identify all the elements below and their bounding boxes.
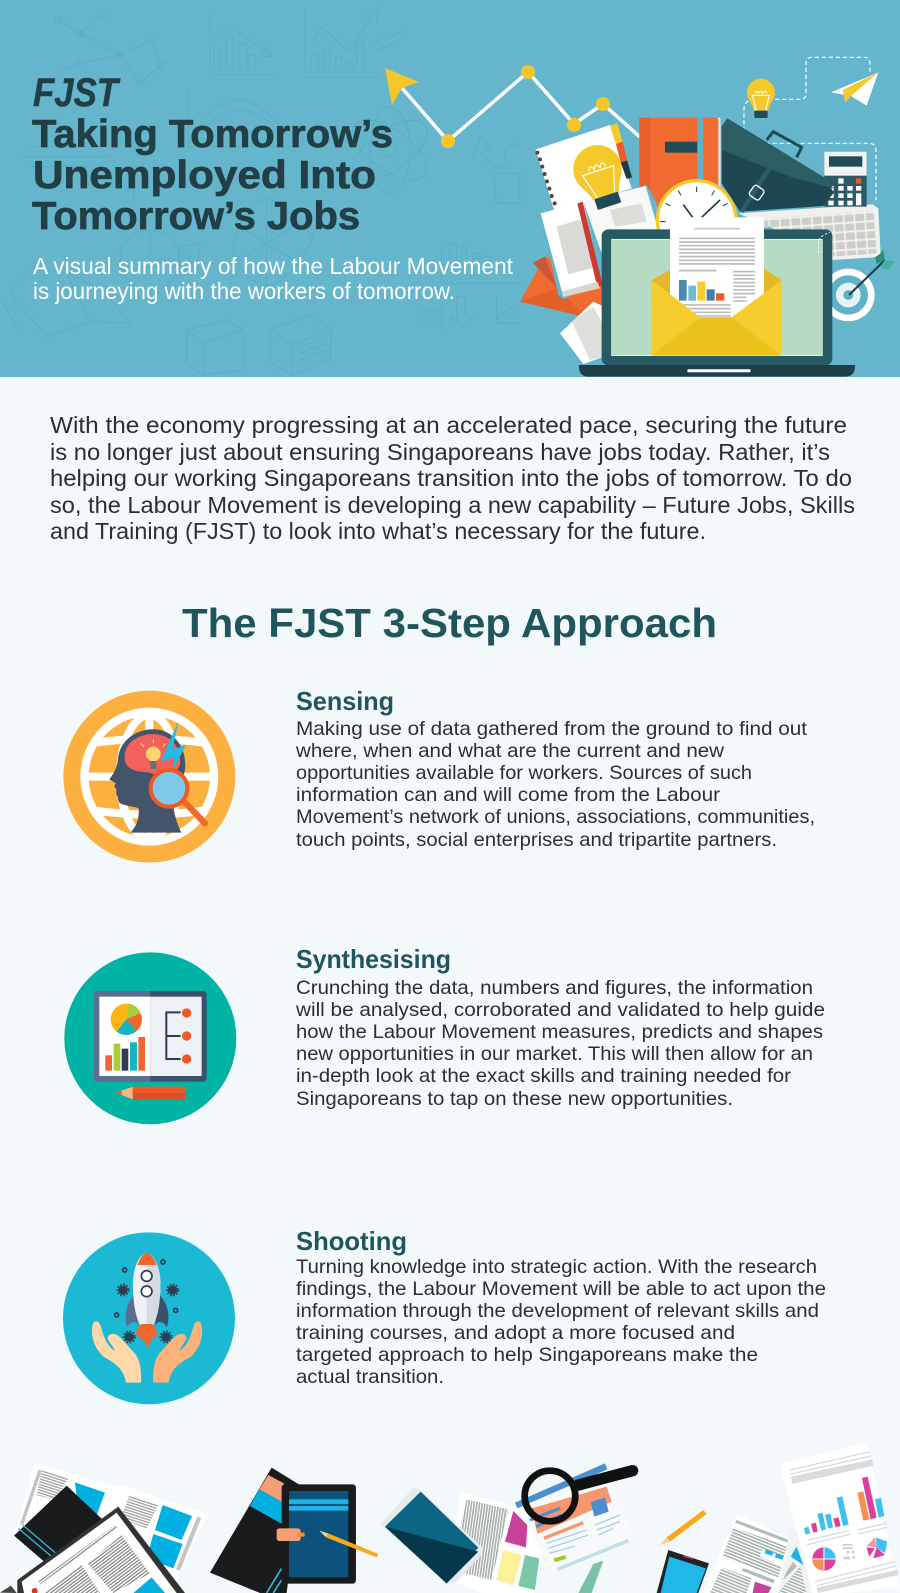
document bar chart (679, 280, 724, 301)
heading: synthesising: Synthesising (296, 944, 451, 974)
subtitle: A visual summary of how the Labour Movement (33, 253, 514, 279)
icon: small light bulb (747, 79, 775, 118)
dashed path (744, 57, 876, 200)
text: shooting description: targeted approach to help Singaporeans make the (296, 1344, 758, 1366)
subtitle: is journeying with the workers of tomorrow. (33, 278, 455, 304)
text: synthesising description: will be analysed, corroborated and validated to help guide (295, 999, 825, 1021)
web page sheet (515, 1463, 635, 1573)
title: main headline: Tomorrow’s Jobs (32, 195, 360, 238)
document text lines (679, 229, 755, 316)
intro paragraph: is no longer just about ensuring Singaporeans have jobs today. Rather, it’s (50, 439, 830, 465)
panel: header (0, 0, 900, 377)
icon: target and arrow (822, 250, 895, 321)
footer illustration: left group (0, 1463, 378, 1593)
icon: presentation board and pencil (64, 952, 236, 1124)
text: synthesising description: Singaporeans to tap on these new opportunities. (296, 1088, 733, 1110)
icon: wall clock (657, 181, 736, 259)
report sheet with charts (780, 1443, 899, 1593)
text: shooting description (296, 1256, 826, 1388)
icon: rocket and hands (63, 1232, 235, 1404)
pie charts (812, 1537, 887, 1571)
illustration: desk objects and laptop (520, 57, 895, 377)
background sketches (3, 8, 520, 375)
smartphone (657, 1550, 709, 1593)
icon: calculator (824, 152, 867, 207)
rising line graph with arrow (385, 65, 640, 148)
icon: envelope with document (652, 217, 782, 356)
icon: orange wrapping (520, 257, 604, 317)
step 1: sensing (63, 686, 815, 863)
text: synthesising description: in-depth look at the exact skills and training needed for (296, 1065, 792, 1087)
icon: white cube (560, 302, 604, 364)
text: sensing description: opportunities available for workers. Sources of such (296, 762, 752, 784)
bar chart (804, 1477, 884, 1535)
green pencil (578, 1561, 603, 1593)
title: main headline: Taking Tomorrow’s (32, 113, 393, 156)
intro paragraph (50, 412, 855, 544)
text: sensing description: information can and will come from the Labour (296, 784, 721, 806)
intro paragraph: With the economy progressing at an accelerated pace, securing the future (50, 412, 847, 438)
step 3: shooting (63, 1226, 826, 1404)
text: shooting description: Turning knowledge into strategic action. With the research (296, 1256, 817, 1278)
subtitle (33, 253, 514, 304)
icon: spiral notebook (535, 123, 632, 213)
icon: head, globe and magnifier (63, 691, 235, 863)
heading: the FJST 3-step approach: The FJST 3-Step Approach (182, 600, 717, 646)
text: shooting description: actual transition. (296, 1366, 444, 1388)
footer illustration: right group (381, 1443, 899, 1593)
text: shooting description: findings, the Labour Movement will be able to act upon the (296, 1278, 826, 1300)
title: main headline (32, 113, 393, 238)
orange pencil (659, 1510, 707, 1545)
text: sensing description: Making use of data gathered from the ground to find out (296, 718, 808, 740)
text: sensing description: touch points, social enterprises and tripartite partners. (296, 829, 777, 851)
intro paragraph: and Training (FJST) to look into what’s necessary for the future. (50, 518, 706, 544)
step 2: synthesising (64, 944, 825, 1124)
heading: shooting: Shooting (296, 1226, 407, 1256)
icon: open book (541, 185, 661, 299)
icon: laptop (579, 229, 855, 377)
mobile phone (381, 1487, 483, 1585)
intro paragraph: so, the Labour Movement is developing a new capability – Future Jobs, Skills (50, 492, 855, 518)
text: synthesising description: how the Labour Movement measures, predicts and shapes (296, 1021, 823, 1043)
icon: orange book (639, 118, 721, 211)
icon: briefcase (722, 118, 833, 212)
black notebook (14, 1486, 107, 1567)
text: sensing description: where, when and what are the current and new (295, 740, 725, 762)
text: sensing description (295, 718, 815, 851)
overlapping report sheets (703, 1514, 813, 1593)
text: synthesising description: new opportunities in our market. This will then allow for an (296, 1043, 813, 1065)
icon: keyboard (738, 204, 881, 260)
paper with colour blocks (450, 1491, 550, 1593)
text: shooting description: information through the development of relevant skills and (296, 1300, 819, 1322)
hand holding tablet (210, 1468, 378, 1593)
tablet with document (0, 1507, 185, 1593)
title: main headline: Unemployed Into (33, 154, 376, 197)
title: FJST: FJST (33, 71, 121, 115)
icon: paper plane (831, 72, 878, 106)
text: shooting description: training courses, and adopt a more focused and (296, 1322, 735, 1344)
text: synthesising description: Crunching the data, numbers and figures, the information (296, 977, 813, 999)
heading: sensing: Sensing (296, 686, 394, 716)
icon: large light bulb (567, 139, 633, 214)
intro paragraph: helping our working Singaporeans transition into the jobs of tomorrow. To do (50, 465, 852, 491)
papers with blue blocks (15, 1463, 207, 1582)
icon: magnifying glass (525, 1471, 633, 1521)
text: sensing description: Movement’s network of unions, associations, communities, (296, 806, 815, 828)
text: synthesising description (295, 977, 825, 1110)
